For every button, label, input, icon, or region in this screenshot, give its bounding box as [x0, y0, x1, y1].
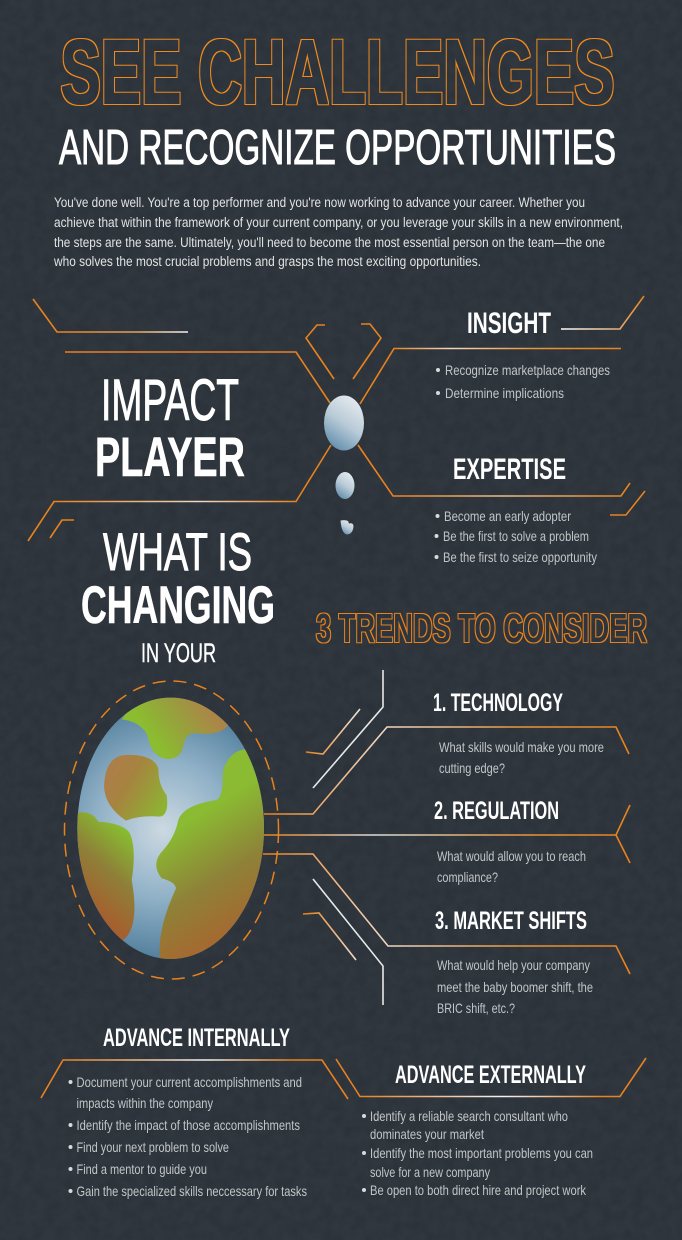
trend 3: market shifts: BRIC shift, etc.? — [437, 1000, 515, 1016]
section: insight: Determine implications — [445, 385, 564, 401]
intro paragraph: You've done well. You're a top performer and you're now working to advance your career. Whether you — [54, 195, 585, 210]
panel: advance externally: solve for a new company — [370, 1164, 490, 1180]
panel: advance internally: Identify the impact of those accomplishments — [76, 1117, 300, 1133]
section: insight — [360, 296, 644, 404]
connector lines from globe to trends — [263, 670, 630, 1005]
trend 3: market shifts: 3. MARKET SHIFTS — [435, 907, 587, 935]
heading: impact player — [95, 368, 245, 488]
trend 2: regulation: What would allow you to reach — [437, 848, 586, 864]
heading: what is changing in your: WHAT IS — [103, 523, 252, 582]
panel: advance internally — [41, 1024, 348, 1199]
panel: advance externally: Identify a reliable search consultant who — [370, 1108, 568, 1124]
section: expertise: Be the first to seize opportunity — [443, 549, 597, 565]
heading: impact player: PLAYER — [95, 425, 245, 488]
panel: advance externally: Identify the most important problems you can — [370, 1145, 593, 1161]
section: insight: INSIGHT — [467, 307, 551, 340]
trend 2: regulation: compliance? — [437, 869, 498, 885]
section: expertise: Be the first to solve a problem — [443, 528, 589, 544]
panel: advance externally: Be open to both direct hire and project work — [370, 1182, 587, 1198]
trend 1: technology: 1. TECHNOLOGY — [433, 689, 563, 717]
heading: impact player: IMPACT — [101, 368, 239, 433]
panel: advance internally: Find your next problem to solve — [76, 1139, 229, 1155]
trend 1: technology: cutting edge? — [439, 760, 505, 776]
panel: advance internally: ADVANCE INTERNALLY — [103, 1024, 290, 1052]
panel: advance externally — [336, 1058, 646, 1198]
panel: advance internally: impacts within the company — [76, 1095, 213, 1111]
trend 2: regulation — [434, 797, 586, 885]
section: insight: Recognize marketplace changes — [445, 362, 610, 378]
section: expertise: EXPERTISE — [453, 453, 566, 486]
trend 3: market shifts: meet the baby boomer shift, the — [437, 979, 593, 995]
section: expertise: Become an early adopter — [444, 508, 571, 524]
section: expertise — [358, 445, 645, 565]
panel: advance internally: Gain the specialized skills neccessary for tasks — [76, 1183, 307, 1199]
impact player connector lines — [28, 299, 381, 541]
trend 1: technology — [433, 689, 604, 776]
heading: what is changing in your: IN YOUR — [141, 638, 216, 668]
trend 3: market shifts: What would help your company — [437, 957, 590, 973]
panel: advance internally: Document your current accomplishments and — [76, 1074, 302, 1090]
heading: what is changing in your — [81, 523, 275, 668]
panel: advance internally: Find a mentor to guide you — [76, 1161, 207, 1177]
heading: what is changing in your: CHANGING — [81, 576, 275, 635]
panel: advance externally: ADVANCE EXTERNALLY — [395, 1061, 586, 1089]
trend 2: regulation: 2. REGULATION — [434, 797, 559, 825]
intro paragraph: who solves the most crucial problems and grasps the most exciting opportunities. — [53, 254, 481, 269]
trend 3: market shifts — [435, 907, 593, 1016]
trend 1: technology: What skills would make you more — [439, 739, 604, 755]
panel: advance externally: dominates your market — [370, 1126, 484, 1142]
globe with dashed orbit — [64, 681, 278, 979]
intro paragraph: the steps are the same. Ultimately, you'll need to become the most essential person on the team—the one — [54, 235, 605, 250]
icon: three descending spheres — [324, 396, 364, 534]
intro paragraph — [53, 195, 623, 269]
